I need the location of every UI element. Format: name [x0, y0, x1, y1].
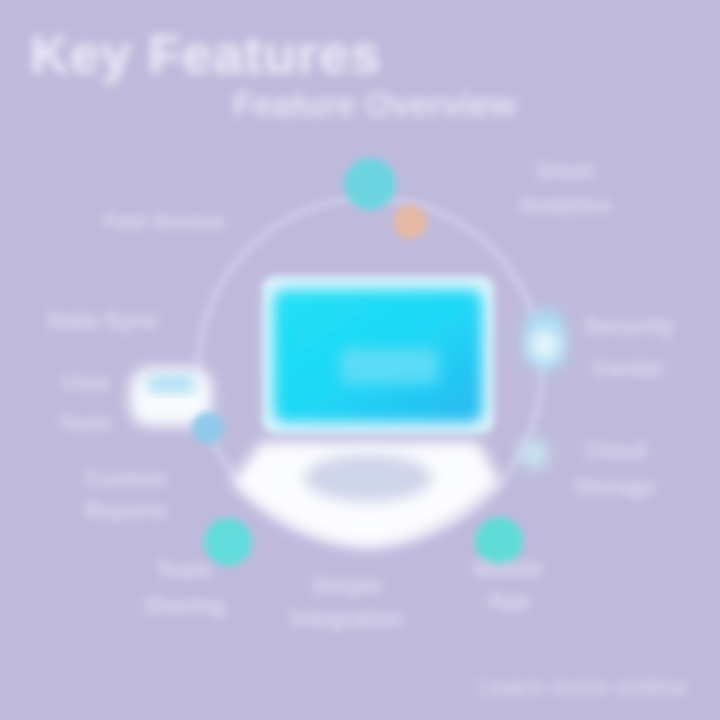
label: bottom center: Integration [290, 606, 404, 631]
label: right upper [584, 313, 674, 381]
label: left middle: Tools [58, 412, 112, 435]
label: top right: Analytics [518, 194, 612, 217]
label: lower left: Custom [85, 466, 167, 491]
label: bottom left [143, 557, 225, 618]
icon: top teal circle [344, 158, 396, 210]
label: left middle: Chat [62, 372, 108, 395]
icon: orange circle [393, 205, 427, 239]
subtitle: Feature Overview [233, 86, 516, 124]
label: bottom left: Team [156, 557, 212, 582]
icon: left message bubble [130, 368, 212, 426]
title: Key Features [30, 25, 381, 85]
label: top left: Fast Access [104, 210, 226, 233]
label: bottom right [473, 556, 543, 613]
label: lower left [84, 466, 168, 523]
label: bottom right: App [487, 588, 529, 613]
icon: laptop base [232, 442, 500, 548]
label: left middle [58, 372, 112, 435]
icon: bottom-left teal circle [204, 518, 252, 566]
label: right upper: Security [584, 313, 674, 339]
icon: laptop screen [262, 276, 494, 434]
label: right lower [574, 438, 656, 499]
label: bottom right: Mobile [473, 556, 543, 581]
label: right lower: Cloud [584, 438, 646, 463]
label: top right: Smart [535, 160, 595, 183]
icon: left small blue circle [192, 412, 224, 444]
label: bottom center [290, 573, 404, 631]
footer note: Learn more online [478, 674, 686, 701]
icon: right small circle [519, 439, 549, 469]
label: bottom left: Sharing [143, 593, 225, 618]
icon: bottom-right teal circle [475, 517, 523, 565]
label: bottom center: Simple [311, 573, 383, 598]
label: left upper: Data Sync [47, 307, 159, 333]
label: top right [518, 160, 612, 217]
label: lower left: Reports [84, 498, 168, 523]
label: right lower: Storage [574, 474, 656, 499]
icon: right light-blue badge [524, 310, 566, 370]
orbit ring [198, 198, 542, 542]
label: right upper: Center [593, 355, 665, 381]
